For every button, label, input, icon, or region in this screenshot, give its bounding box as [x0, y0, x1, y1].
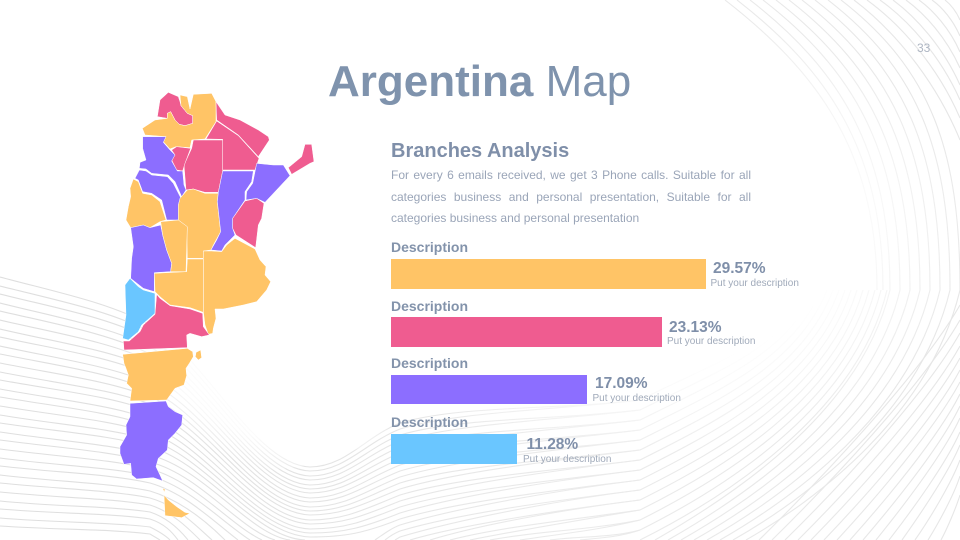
bar row 3: Put your description — [592, 393, 681, 404]
page number: 33 — [917, 41, 931, 55]
bar row 4: Description — [391, 414, 468, 430]
bar row 2: Description — [391, 298, 468, 314]
southern provinces — [120, 401, 190, 518]
bar row 1 — [391, 239, 799, 289]
title: Argentina Map — [328, 57, 631, 106]
bar row 2 — [391, 298, 755, 347]
bar row 3 — [391, 355, 681, 404]
bar row 2: Put your description — [667, 336, 755, 347]
paragraph: categories business and personal presentation, Suitable for all — [391, 190, 751, 204]
bar row 4: Put your description — [523, 454, 611, 465]
bar row 1: 29.57% — [713, 260, 766, 277]
bar row 1: Put your description — [710, 278, 799, 289]
bar row 3: Description — [391, 355, 468, 371]
paragraph: For every 6 emails received, we get 3 Phone calls. Suitable for all — [391, 168, 751, 182]
bar row 4 — [391, 414, 611, 465]
bar row 2: 23.13% — [669, 319, 722, 336]
northern provinces — [126, 92, 314, 258]
bar row 1: Description — [391, 239, 468, 255]
paragraph: categories business and personal presentation — [391, 211, 639, 225]
bar row 4: 11.28% — [526, 436, 578, 453]
central provinces — [123, 220, 271, 401]
bar row 3: 17.09% — [595, 375, 648, 392]
heading: branches analysis: Branches Analysis — [391, 140, 569, 162]
paragraph — [391, 168, 751, 225]
